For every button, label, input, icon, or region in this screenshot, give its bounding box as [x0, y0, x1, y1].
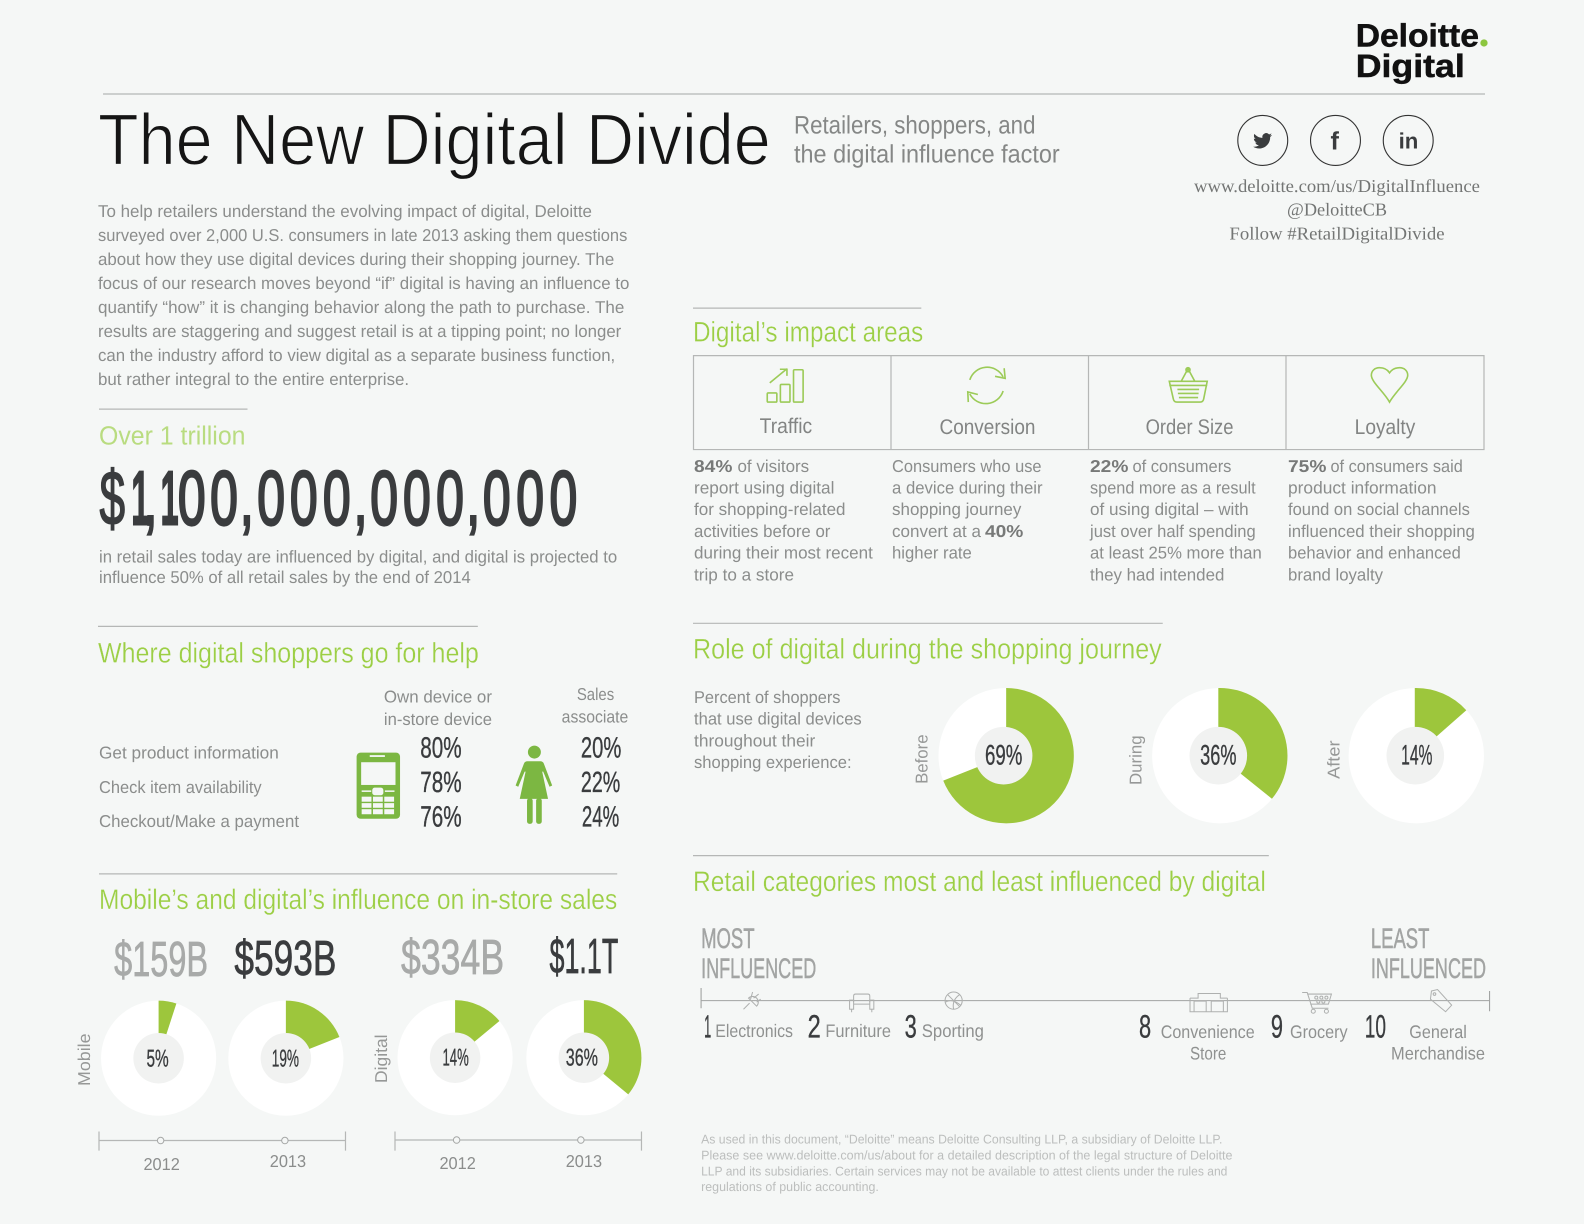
row labels: Get product information: [99, 744, 279, 763]
timeline: digital years: 2013: [566, 1152, 602, 1171]
donut: during 36%: 36%: [1200, 739, 1236, 771]
category numbers: 2: [808, 1008, 821, 1045]
timeline: digital years: [395, 1131, 641, 1173]
icon: woman: [516, 746, 552, 824]
heading: Mobile’s and digital’s influence on in-store sales: [99, 884, 617, 915]
dollar figures: [114, 929, 618, 987]
social icons: [1238, 115, 1433, 165]
big number: 00,000,000,000: [178, 456, 577, 541]
text: loyalty: [1288, 457, 1475, 584]
icon: basket: [1169, 368, 1207, 402]
category labels: General: [1409, 1022, 1467, 1042]
text: traffic: report using digital: [694, 478, 834, 498]
logo: Digital: [1356, 47, 1465, 84]
contact links: [1194, 176, 1480, 243]
panel: retail categories: [693, 856, 1490, 1064]
text: order size: 22%: [1090, 457, 1128, 476]
panel: over 1 trillion: [99, 409, 617, 587]
text: order size: at least 25% more than: [1090, 544, 1262, 563]
column heading: associate: associate: [562, 707, 628, 726]
icon: furniture: [850, 994, 874, 1012]
category labels: Furniture: [825, 1021, 891, 1041]
text: conversion: convert at a: [892, 522, 981, 541]
timeline: mobile years: 2013: [270, 1152, 306, 1171]
footnote: regulations of public accounting.: [701, 1180, 879, 1194]
title: The New Digital Divide: [98, 100, 771, 181]
caption: in retail sales today are influenced by digital, and digital is projected to: [99, 548, 617, 567]
column heading: associate: [562, 685, 628, 726]
subtitle: [794, 111, 1060, 169]
category labels: [715, 1021, 1485, 1064]
icon: linkedin: in: [1399, 128, 1418, 154]
text: conversion: [892, 457, 1043, 563]
intro paragraph: surveyed over 2,000 U.S. consumers in late 2013 asking them questions: [98, 226, 627, 245]
text: order size: of consumers: [1132, 457, 1231, 476]
table box: [694, 356, 1484, 450]
dollar figures: $593B: [234, 931, 336, 986]
donut: before 69%: 69%: [985, 739, 1022, 771]
panel: role of digital during the shopping journey: [693, 623, 1484, 823]
subtitle: the digital influence factor: [794, 140, 1060, 169]
text: order size: they had intended: [1090, 565, 1224, 584]
row labels: [99, 744, 299, 831]
big number: 1: [131, 456, 149, 541]
associate percentages: 20%: [581, 732, 621, 765]
text: traffic: during their most recent: [694, 544, 873, 563]
heading: Digital’s impact areas: [693, 316, 923, 348]
footnote: [701, 1132, 1232, 1194]
intro paragraph: [98, 202, 629, 389]
intro paragraph: but rather integral to the entire enterprise.: [98, 370, 409, 389]
subtitle: Retailers, shoppers, and: [794, 111, 1035, 139]
contact links: Follow #RetailDigitalDivide: [1229, 223, 1445, 243]
icon: conversion arrows: [968, 367, 1005, 404]
donut: digital 2012 14%: 14%: [442, 1044, 469, 1071]
footnote: As used in this document, “Deloitte” means Deloitte Consulting LLP, a subsidiary of Deloitte LLP.: [701, 1132, 1222, 1147]
device percentages: 80%: [420, 732, 462, 765]
side label: during: During: [1126, 735, 1146, 785]
icon: plug: [744, 992, 761, 1009]
most influenced: MOST: [701, 923, 755, 954]
panel: mobile and digital influence on in-store sales: [75, 874, 641, 1174]
side label: before: Before: [912, 734, 931, 784]
donut: during 36%: [1152, 688, 1288, 823]
column heading: associate: Sales: [577, 685, 614, 704]
label: conversion: Conversion: [939, 416, 1035, 439]
heading: Where digital shoppers go for help: [98, 637, 479, 669]
big number: 1: [161, 456, 179, 541]
category labels: Sporting: [922, 1021, 984, 1041]
description: Percent of shoppers: [694, 688, 840, 707]
text: conversion: 40%: [985, 522, 1023, 541]
text: traffic: of visitors: [737, 457, 809, 476]
text: loyalty: found on social channels: [1288, 500, 1470, 519]
description: throughout their: [694, 731, 816, 751]
least influenced: INFLUENCED: [1371, 953, 1486, 984]
category numbers: 8: [1139, 1008, 1151, 1045]
column heading: device: in-store device: [384, 710, 492, 729]
dollar figures: $334B: [401, 930, 504, 985]
category labels: Electronics: [715, 1021, 793, 1041]
text: traffic: trip to a store: [694, 565, 794, 584]
text: conversion: shopping journey: [892, 500, 1022, 519]
intro paragraph: To help retailers understand the evolving impact of digital, Deloitte: [98, 202, 592, 221]
associate percentages: 24%: [582, 801, 619, 833]
text: conversion: a device during their: [892, 478, 1043, 498]
caption: influence 50% of all retail sales by the end of 2014: [99, 568, 471, 587]
text: traffic: [694, 457, 873, 584]
icon: cart: [1302, 993, 1331, 1013]
text: order size: of using digital – with: [1090, 500, 1249, 519]
logo: [1356, 17, 1488, 84]
category labels: Grocery: [1290, 1022, 1348, 1042]
icon: tag: [1430, 990, 1452, 1012]
donut: mobile 2013 19%: [228, 1001, 343, 1116]
icon: store: [1190, 994, 1227, 1012]
timeline: mobile years: 2012: [143, 1155, 180, 1174]
caption: [99, 548, 617, 587]
text: loyalty: 75%: [1288, 457, 1326, 476]
most influenced: [701, 923, 816, 984]
intro paragraph: quantify “how” it is changing behavior along the path to purchase. The: [98, 298, 624, 317]
big number: $: [100, 456, 125, 541]
category labels: Convenience: [1161, 1022, 1255, 1042]
big number: ,: [143, 456, 157, 541]
label: order size: Order Size: [1146, 416, 1233, 439]
category labels: Store: [1190, 1044, 1226, 1064]
column heading: device: Own device or: [384, 687, 492, 707]
category numbers: 3: [905, 1008, 917, 1045]
row labels: Checkout/Make a payment: [99, 812, 299, 831]
icon: phone: [357, 753, 400, 819]
dollar figures: $159B: [114, 932, 208, 987]
description: [694, 688, 862, 772]
heading: Retail categories most and least influenced by digital: [693, 866, 1266, 897]
device percentages: [420, 732, 462, 833]
text: loyalty: product information: [1288, 478, 1437, 498]
label: loyalty: Loyalty: [1355, 416, 1416, 439]
side label: mobile: Mobile: [75, 1033, 94, 1086]
category numbers: 10: [1365, 1008, 1386, 1045]
text: conversion: higher rate: [892, 544, 972, 563]
logo: Deloitte: [1356, 17, 1479, 54]
column heading: device: [384, 687, 492, 729]
panel: digital's impact areas: [693, 308, 1484, 584]
scale line: [701, 988, 1490, 1011]
icon: sporting ball: [945, 992, 962, 1009]
description: shopping experience:: [694, 753, 852, 772]
intro paragraph: about how they use digital devices during their shopping journey. The: [98, 250, 614, 269]
text: traffic: for shopping-related: [694, 500, 846, 519]
contact links: @DeloitteCB: [1287, 200, 1387, 220]
intro paragraph: results are staggering and suggest retail is at a tipping point; no longer: [98, 322, 622, 341]
donut: after 14%: [1349, 688, 1484, 823]
contact links: www.deloitte.com/us/DigitalInfluence: [1194, 176, 1480, 196]
donut: digital 2013 36%: [526, 1000, 641, 1115]
donut: before 69%: [938, 688, 1074, 823]
side label: digital: Digital: [372, 1034, 391, 1083]
icon: twitter: [1238, 115, 1288, 165]
intro paragraph: focus of our research moves beyond “if” digital is having an influence to: [98, 274, 629, 293]
side label: after: After: [1324, 740, 1344, 779]
most influenced: INFLUENCED: [701, 953, 816, 984]
row labels: Check item availability: [99, 778, 262, 797]
device percentages: 76%: [420, 801, 462, 833]
text: order size: just over half spending: [1089, 522, 1256, 541]
donut: digital 2013 36%: 36%: [566, 1044, 598, 1071]
donut: after 14%: 14%: [1401, 739, 1432, 771]
text: traffic: 84%: [694, 457, 732, 476]
intro paragraph: can the industry afford to view digital as a separate business function,: [98, 346, 615, 365]
dollar figures: $1.1T: [550, 929, 618, 984]
donut: mobile 2013 19%: 19%: [272, 1045, 299, 1072]
category numbers: [704, 1008, 1386, 1045]
label: traffic: Traffic: [760, 415, 812, 438]
icon: traffic bars: [767, 369, 803, 402]
description: that use digital devices: [694, 709, 862, 728]
heading: Role of digital during the shopping journey: [693, 633, 1162, 665]
footnote: Please see www.deloitte.com/us/about for a detailed description of the legal structure of Deloitte: [701, 1149, 1232, 1163]
associate percentages: [581, 732, 621, 833]
timeline: digital years: 2012: [439, 1154, 476, 1173]
footnote: LLP and its subsidiaries. Certain services may not be available to attest clients under the rules and: [701, 1164, 1227, 1178]
icon: heart: [1371, 368, 1408, 402]
donut: mobile 2012 5%: [101, 1001, 216, 1116]
least influenced: [1371, 923, 1486, 984]
text: loyalty: influenced their shopping: [1288, 522, 1475, 541]
icon: linkedin: [1383, 115, 1433, 165]
associate percentages: 22%: [581, 767, 620, 799]
icon: facebook: f: [1330, 127, 1340, 156]
category labels: Merchandise: [1391, 1044, 1485, 1064]
text: traffic: activities before or: [694, 522, 831, 541]
text: loyalty: brand loyalty: [1288, 565, 1383, 584]
donut: mobile 2012 5%: 5%: [146, 1045, 169, 1072]
category numbers: 1: [704, 1008, 711, 1045]
category numbers: 9: [1271, 1008, 1283, 1045]
panel: where digital shoppers go for help: [98, 626, 628, 833]
least influenced: LEAST: [1371, 923, 1429, 954]
heading: Over 1 trillion: [99, 420, 245, 451]
text: loyalty: behavior and enhanced: [1288, 544, 1461, 563]
device percentages: 78%: [420, 767, 462, 799]
text: order size: [1089, 457, 1262, 584]
text: loyalty: of consumers said: [1330, 457, 1463, 476]
donut: digital 2012 14%: [398, 1000, 513, 1115]
text: conversion: Consumers who use: [892, 457, 1042, 476]
timeline: mobile years: [99, 1131, 345, 1174]
icon: facebook: [1311, 115, 1360, 165]
text: order size: spend more as a result: [1090, 478, 1256, 498]
